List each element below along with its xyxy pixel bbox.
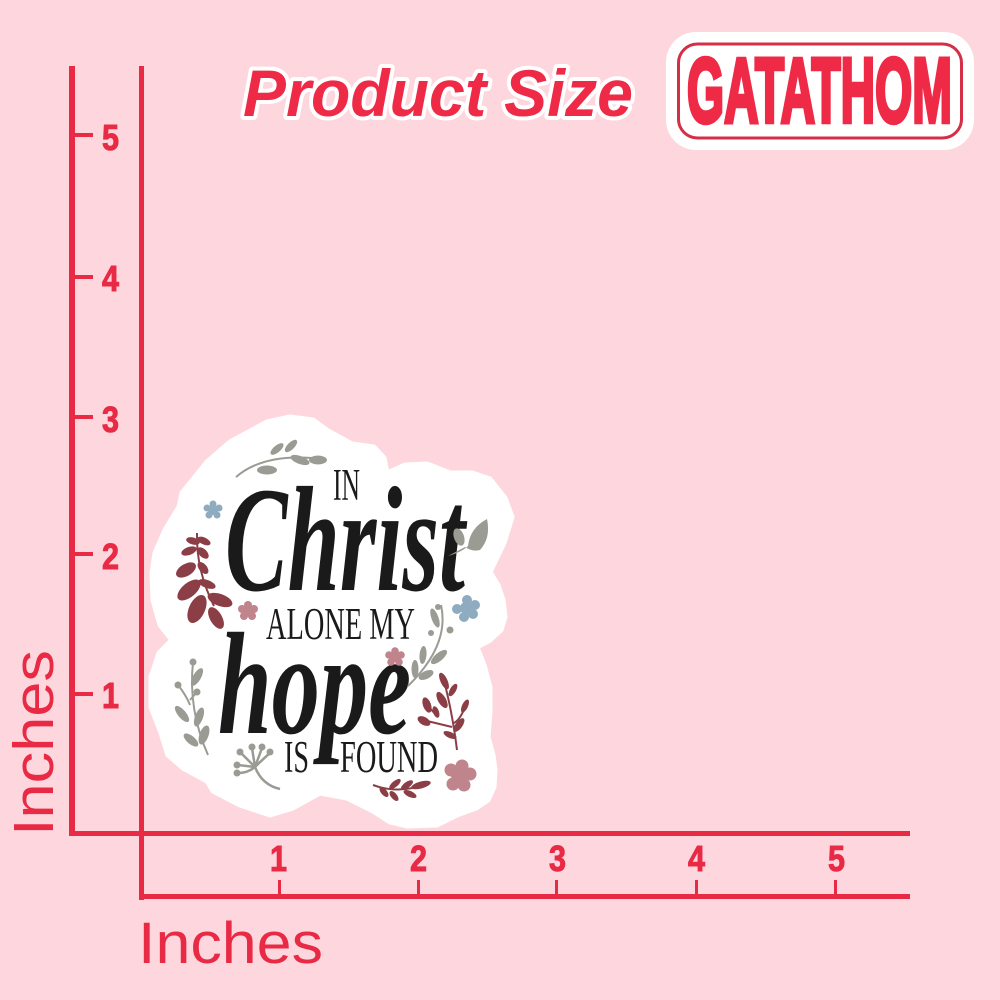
horizontal ruler numbers <box>270 838 845 879</box>
sticker <box>151 417 512 826</box>
icon: pink flower center <box>385 647 405 666</box>
icon: pink flower left <box>238 601 258 620</box>
axis label: Inches horizontal: Inches <box>138 911 323 976</box>
icon: grey seed sprig bottom <box>234 744 280 789</box>
sticker die-cut background <box>151 417 512 826</box>
horizontal ruler <box>69 831 910 899</box>
icon: burgundy branch right <box>416 671 471 750</box>
icon: blue flower left <box>204 500 222 518</box>
vertical ruler numbers <box>102 117 119 716</box>
vertical ruler ticks <box>74 133 93 696</box>
vertical ruler numbers: 2 <box>102 536 119 577</box>
lettering: In Christ alone my hope is found: FOUND <box>340 732 438 782</box>
horizontal ruler numbers: 1 <box>270 838 287 879</box>
title: Product Size: Product Size <box>243 56 633 130</box>
vertical ruler numbers: 5 <box>102 117 119 158</box>
icon: grey sprig left <box>173 658 212 755</box>
icon: blue flower right <box>452 595 480 622</box>
vertical ruler numbers: 3 <box>102 399 119 440</box>
icon: grey leaf right <box>448 519 488 556</box>
title: Product Size: Product Size <box>243 56 633 130</box>
icon: grey sprig right <box>408 604 454 686</box>
axis label: Inches vertical: Inches <box>2 650 66 836</box>
icon: pink flower bottom <box>444 760 476 792</box>
lettering: In Christ alone my hope is found: Christ <box>225 457 468 623</box>
horizontal ruler ticks <box>278 880 837 895</box>
horizontal ruler numbers: 4 <box>688 838 705 879</box>
vertical ruler numbers: 4 <box>102 258 119 299</box>
vertical ruler numbers: 1 <box>102 675 119 716</box>
horizontal ruler numbers: 3 <box>549 838 566 879</box>
lettering: In Christ alone my hope is found <box>218 457 468 782</box>
icon: grey sprig top <box>236 438 327 477</box>
vertical ruler <box>69 66 144 900</box>
horizontal ruler numbers: 2 <box>410 838 427 879</box>
lettering: In Christ alone my hope is found: ALONE MY <box>266 599 415 649</box>
horizontal ruler numbers: 5 <box>828 838 845 879</box>
lettering: In Christ alone my hope is found: IS <box>284 732 309 782</box>
lettering: In Christ alone my hope is found: IN <box>333 460 360 510</box>
icon: burgundy branch left <box>173 533 234 631</box>
icon: burgundy branch bottom <box>373 777 432 803</box>
lettering: In Christ alone my hope is found: hope <box>218 603 411 765</box>
